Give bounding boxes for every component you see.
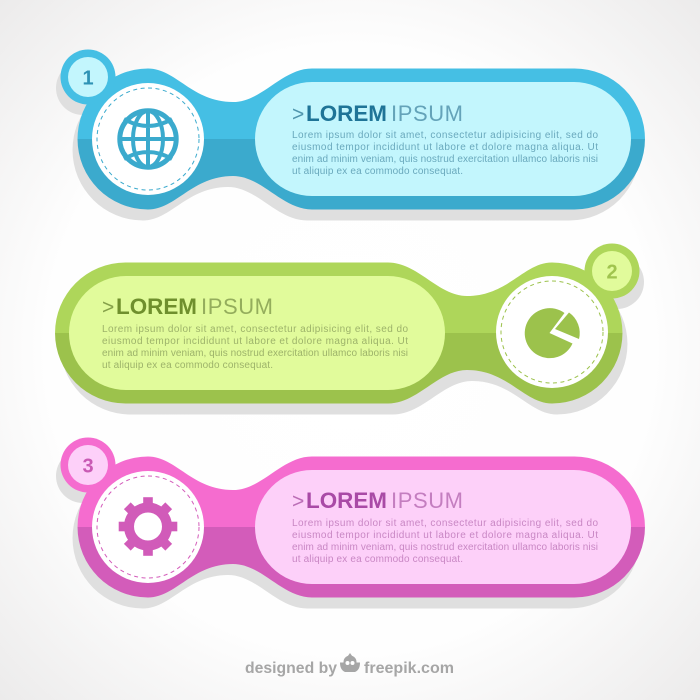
heading bold part: LOREM (116, 294, 197, 319)
body text: ut aliquip ex ea commodo consequat. (102, 360, 273, 371)
body text (292, 518, 598, 565)
inner panel: green text area (69, 276, 445, 390)
body text: enim ad minim veniam, quis nostrud exercitation ullamco laboris nisi (102, 348, 408, 359)
body text: ut aliquip ex ea commodo consequat. (292, 166, 463, 177)
inner panel: pink text area (255, 470, 631, 584)
body text: Lorem ipsum dolor sit amet, consectetur adipisicing elit, sed do (102, 324, 408, 335)
heading: lorem ipsum: > (292, 490, 304, 513)
heading light part: IPSUM (391, 488, 463, 513)
body text (102, 324, 408, 371)
heading bold part: LOREM (306, 488, 387, 513)
panel: banner 2 green (55, 244, 644, 414)
heading: lorem ipsum: > (102, 296, 114, 319)
body text: eiusmod tempor incididunt ut labore et dolore magna aliqua. Ut (292, 530, 598, 541)
body text: enim ad minim veniam, quis nostrud exercitation ullamco laboris nisi (292, 542, 598, 553)
body text: eiusmod tempor incididunt ut labore et dolore magna aliqua. Ut (102, 336, 408, 347)
badge: number 1: 1 (82, 68, 94, 90)
body text: Lorem ipsum dolor sit amet, consectetur adipisicing elit, sed do (292, 518, 598, 529)
icon: gear in dashed circle (92, 471, 204, 583)
badge: number 3: 3 (82, 456, 94, 478)
body text: ut aliquip ex ea commodo consequat. (292, 554, 463, 565)
heading light part: IPSUM (201, 294, 273, 319)
badge: number 3 (60, 438, 116, 492)
heading: lorem ipsum: > (292, 103, 304, 126)
heading bold part: LOREM (306, 101, 387, 126)
body text (292, 130, 598, 177)
heading light part: IPSUM (391, 101, 463, 126)
badge: number 2 (584, 244, 640, 298)
badge: number 1 (60, 50, 116, 104)
panel: banner 1 blue (56, 50, 645, 220)
footer: freepik credit (245, 653, 454, 677)
icon: pie chart in dashed circle (496, 276, 608, 388)
footer: freepik credit: designed by (245, 660, 337, 677)
body text: enim ad minim veniam, quis nostrud exercitation ullamco laboris nisi (292, 154, 598, 165)
icon: globe in dashed circle (92, 83, 204, 195)
badge: number 2: 2 (606, 262, 618, 284)
inner panel: blue text area (255, 82, 631, 196)
footer: freepik credit: freepik.com (364, 660, 454, 677)
body text: Lorem ipsum dolor sit amet, consectetur adipisicing elit, sed do (292, 130, 598, 141)
icon: freepik mascot (340, 653, 360, 672)
body text: eiusmod tempor incididunt ut labore et dolore magna aliqua. Ut (292, 142, 598, 153)
panel: banner 3 pink (56, 438, 645, 608)
